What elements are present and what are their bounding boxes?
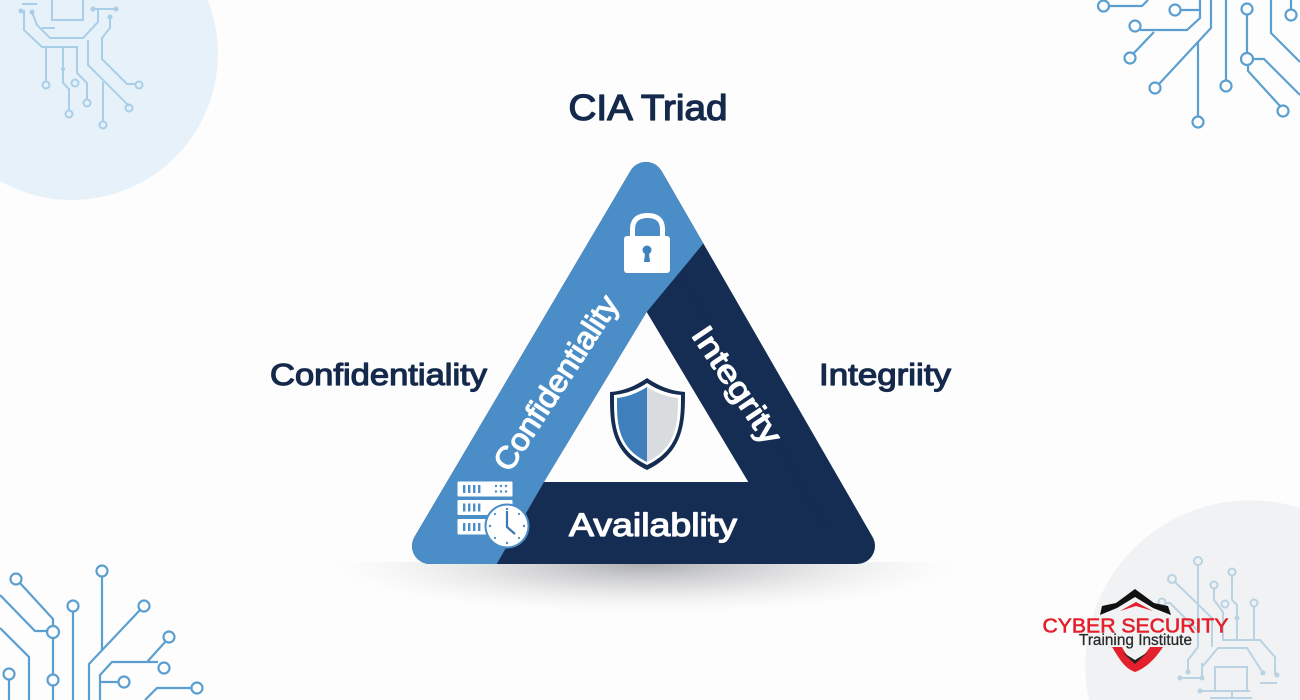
band label: Availability: Availablity (569, 507, 737, 543)
logo: Cyber Security Training Institute (1042, 589, 1229, 672)
logo black chevron (1122, 652, 1148, 664)
band label: Integrity: Integrity (685, 319, 790, 451)
label: Integrity: Integriity (819, 357, 952, 392)
decorative circuit: top right (1098, 0, 1300, 128)
icon: shield (610, 378, 685, 470)
inner triangle (544, 312, 748, 482)
decorative circle: bottom right with circuit (1085, 500, 1300, 700)
title: CIA Triad (568, 87, 728, 128)
decorative circuit: bottom left (0, 566, 202, 700)
band label: Confidentiality: Confidentiality (486, 288, 626, 477)
CIA triangle (430, 180, 857, 546)
decorative circle: top left with circuit (0, 0, 218, 200)
label: Confidentiality: Confidentiality (270, 357, 488, 392)
segment: confidentiality (blue) (412, 162, 703, 564)
logo text: Cyber Security: CYBER SECURITY (1042, 614, 1229, 638)
triangle shadow (397, 562, 892, 604)
logo shield top (1100, 589, 1171, 615)
segment: integrity and availability (navy) (430, 180, 857, 546)
icon: padlock (624, 216, 670, 273)
icon: server with clock (458, 482, 530, 548)
logo shield bottom (1112, 647, 1163, 672)
logo red arc (1120, 602, 1153, 611)
logo text: Training Institute: Training Institute (1079, 632, 1192, 649)
